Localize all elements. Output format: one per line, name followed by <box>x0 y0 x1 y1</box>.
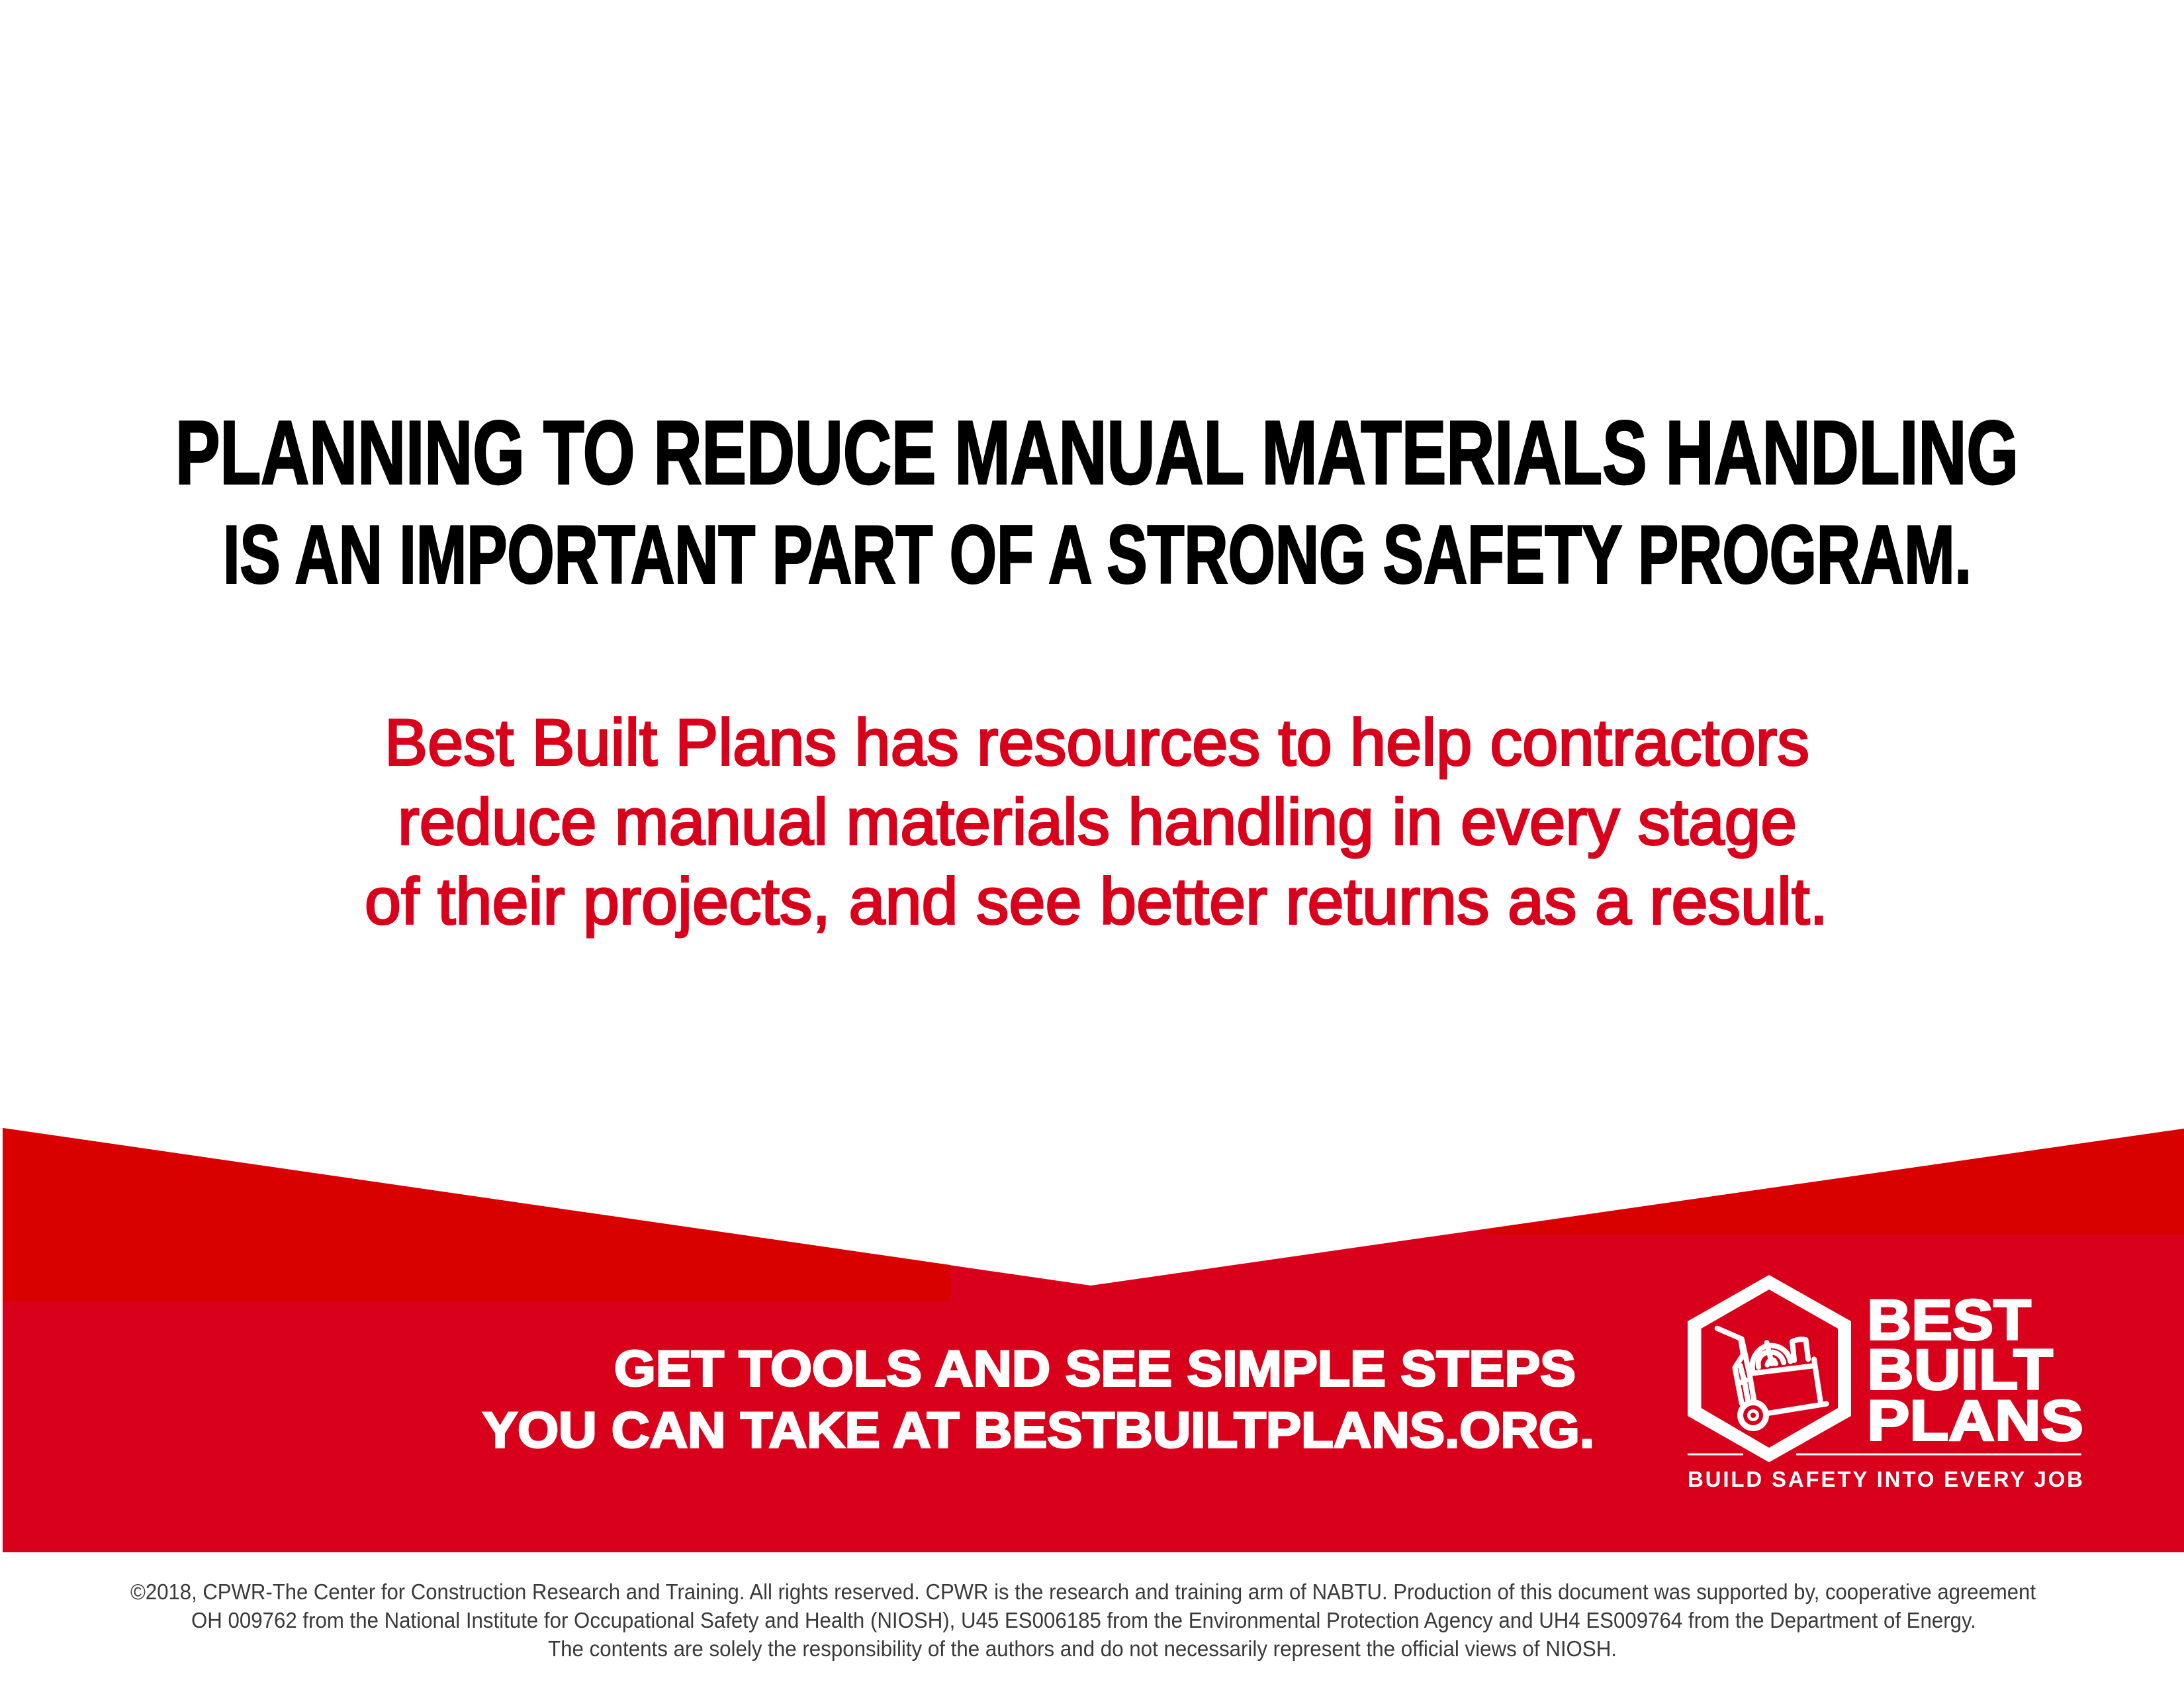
icon: hand truck with materials <box>1717 1329 1827 1413</box>
red intro text: of their projects, and see better returns as a result. <box>365 865 1828 937</box>
icon: hexagon frame <box>1688 1275 1851 1462</box>
copyright footer: ©2018, CPWR-The Center for Construction Research and Training. All rights reserved. CPWR is the research and training arm of NABTU. Production of this document was supported by, cooperative agreement <box>130 1579 2036 1604</box>
red footer banner <box>3 1128 2184 1552</box>
logo tagline: BUILD SAFETY INTO EVERY JOB <box>1688 1467 2083 1491</box>
logo rule <box>1688 1454 2081 1455</box>
red intro text <box>365 706 1828 937</box>
icon: hand truck wheel <box>1737 1399 1769 1431</box>
headline <box>175 402 2019 601</box>
logo wordmark: PLANS <box>1867 1389 2083 1452</box>
red intro text: reduce manual materials handling in every stage <box>398 785 1797 858</box>
red intro text: Best Built Plans has resources to help contractors <box>385 706 1809 778</box>
logo: Best Built Plans <box>1688 1275 2083 1491</box>
logo wordmark: BUILT <box>1867 1338 2053 1402</box>
copyright footer: OH 009762 from the National Institute for Occupational Safety and Health (NIOSH), U45 ES006185 from the Environmental Protection Agency and UH4 ES009764 from the Department of Energy. <box>191 1608 1976 1632</box>
copyright footer <box>130 1579 2036 1661</box>
copyright footer: The contents are solely the responsibility of the authors and do not necessarily represent the official views of NIOSH. <box>548 1636 1617 1661</box>
call to action <box>482 1341 1594 1459</box>
call to action: YOU CAN TAKE AT BESTBUILTPLANS.ORG. <box>482 1402 1594 1459</box>
logo wordmark <box>1867 1288 2083 1452</box>
logo wordmark: BEST <box>1867 1288 2031 1352</box>
call to action: GET TOOLS AND SEE SIMPLE STEPS <box>614 1341 1576 1397</box>
